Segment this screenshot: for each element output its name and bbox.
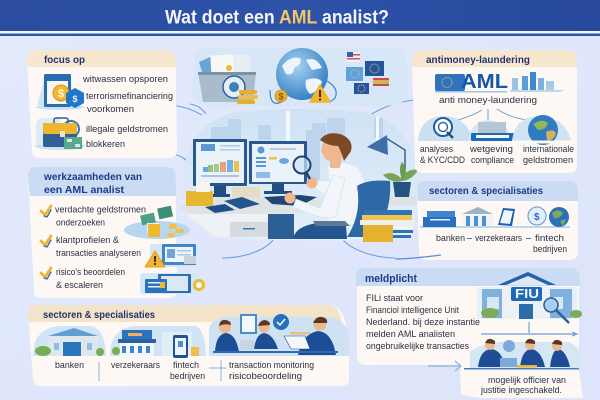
icon: check 2 bbox=[41, 236, 51, 247]
heading: werkzaamheden: werkzaamheden van bbox=[43, 171, 142, 183]
text: transaction monitoring: transaction monitoring bbox=[229, 360, 314, 371]
icon: flags bbox=[346, 52, 389, 94]
logo: AML: AML bbox=[461, 71, 508, 93]
icon: internationale globe bbox=[512, 115, 572, 145]
logo: AML bbox=[435, 71, 565, 93]
icon: check 1 bbox=[41, 206, 51, 217]
icon: check 3 bbox=[41, 268, 51, 279]
icon row: banks, document, coin, globe bbox=[420, 207, 570, 228]
icon: globe with coin and warning bbox=[270, 48, 336, 103]
chair bbox=[313, 181, 390, 237]
text: transaction monitoring bbox=[229, 360, 314, 382]
heading: antimoney-laundering: antimoney-laundering bbox=[426, 54, 530, 66]
desk bbox=[180, 182, 417, 239]
icon: document box with coins bbox=[198, 54, 258, 104]
text: witwassen opsporen: witwassen opsporen bbox=[82, 74, 168, 85]
text: banken verzekeraars fintech bedrijven: banken bbox=[436, 233, 465, 244]
heading: focus op: focus op bbox=[44, 54, 85, 66]
text: banken verzekeraars fintech bedrijven: bedrijven bbox=[533, 244, 567, 255]
text: officier van justitie: justitie ingeschakeld. bbox=[480, 385, 562, 396]
text: terrorismefinanciering voorkomen: voorkomen bbox=[87, 104, 134, 115]
text: analyses KYC/CDD bbox=[420, 144, 465, 166]
heading: werkzaamheden bbox=[43, 171, 142, 196]
text: FIU explanation: ongebruikelijke transacties bbox=[366, 341, 469, 352]
text: terrorismefinanciering voorkomen: terrorismefinanciering bbox=[86, 91, 173, 102]
title banner: Wat doet een AML analist? bbox=[165, 8, 389, 28]
text: illegale geldstromen blokkeren: blokkeren bbox=[86, 139, 125, 150]
text: internationale geldstromen: internationale bbox=[523, 144, 574, 155]
analyst bbox=[284, 133, 366, 239]
icon row: banks, document, coin, globe: $ bbox=[534, 212, 540, 223]
panel: sectoren right bbox=[417, 181, 578, 260]
text: internationale geldstromen bbox=[523, 144, 574, 166]
panel: antimoney-laundering bbox=[412, 50, 577, 173]
text: wetgeving compliance bbox=[469, 144, 514, 166]
connector curves bbox=[171, 99, 427, 258]
text: FIU explanation bbox=[366, 293, 480, 352]
text: illegale geldstromen blokkeren bbox=[86, 124, 168, 150]
icon: warning and client profile bbox=[145, 244, 196, 267]
illustration: analist aan bureau bbox=[180, 109, 418, 242]
text: klantprofielen bbox=[56, 235, 141, 259]
text: banken verzekeraars fintech bedrijven: verzekeraars bbox=[475, 233, 522, 244]
icon: document with dollar coin and shield: $ bbox=[72, 94, 78, 104]
text: risico's beoordelen bbox=[56, 267, 125, 291]
text: FIU explanation: FILi staat voor bbox=[366, 293, 423, 304]
panel: focus op bbox=[27, 50, 177, 158]
heading: werkzaamheden: een AML analist bbox=[44, 184, 125, 196]
panel: sectoren bottom bbox=[28, 305, 349, 386]
panel: werkzaamheden bbox=[28, 167, 205, 298]
icon: coins and banknotes bbox=[124, 206, 190, 239]
text: klantprofielen: klantprofielen & bbox=[56, 235, 120, 246]
panel: top center illustration bbox=[192, 47, 408, 106]
icon: document with dollar coin and shield bbox=[36, 74, 84, 110]
icon: FIU building with magnifier bbox=[477, 272, 582, 323]
arrow: FIU down and right bbox=[481, 322, 577, 336]
text: officier van justitie bbox=[480, 375, 566, 396]
title banner bbox=[0, 0, 600, 36]
icon: magnifying glass bbox=[294, 156, 310, 179]
text: illegale geldstromen blokkeren: illegale geldstromen bbox=[86, 124, 168, 135]
text: terrorismefinanciering voorkomen bbox=[86, 91, 173, 115]
text: analyses KYC/CDD: & KYC/CDD bbox=[420, 155, 465, 166]
icon: briefcase with banknotes bbox=[35, 118, 85, 150]
text: wetgeving compliance: compliance bbox=[471, 155, 514, 166]
illustration: three analysts meeting bbox=[209, 314, 349, 356]
text: internationale geldstromen: geldstromen bbox=[523, 155, 573, 166]
text: klantprofielen: transacties analyseren bbox=[56, 248, 141, 259]
text: officier van justitie: mogelijk officier van bbox=[488, 375, 566, 386]
text: banken: banken bbox=[55, 360, 84, 371]
icon: FIU building with magnifier: FIU bbox=[515, 287, 539, 301]
icon: bank building bbox=[33, 326, 106, 356]
text: analyses KYC/CDD: analyses bbox=[420, 144, 453, 155]
heading: sectoren bottom: sectoren & specialisaties bbox=[43, 309, 155, 321]
heading: meldplicht: meldplicht bbox=[365, 273, 417, 285]
icon: compliance document stack bbox=[468, 120, 514, 141]
text: risico's beoordelen: risico's beoordelen bbox=[56, 267, 125, 278]
text: banken verzekeraars fintech bedrijven: fintech bbox=[535, 233, 564, 244]
text: verzekeraars: verzekeraars bbox=[111, 360, 160, 371]
arrow: to officer bbox=[428, 361, 461, 371]
text: fintech bedrijven bbox=[170, 360, 205, 382]
text: fintech bedrijven: fintech bbox=[173, 360, 199, 371]
monitor left bbox=[193, 139, 247, 197]
city skyline bbox=[211, 118, 383, 180]
lamp and plant bbox=[367, 135, 418, 197]
icon: risk cards bbox=[140, 273, 205, 294]
heading: sectoren right: sectoren & specialisaties bbox=[429, 185, 543, 197]
panel: meldplicht bbox=[356, 268, 583, 398]
text: verdachte geldstromen bbox=[55, 204, 146, 228]
text: anti money-laundering: anti money-laundering bbox=[439, 95, 537, 106]
text: verdachte geldstromen: verdachte geldstromen bbox=[55, 204, 146, 216]
text: risico's beoordelen: & escaleren bbox=[56, 280, 103, 291]
text: fintech bedrijven: bedrijven bbox=[170, 371, 205, 382]
text: FIU explanation: Nederland. bij deze instantie bbox=[366, 317, 480, 328]
icon: globe with coin and warning: $ bbox=[278, 92, 284, 102]
text: banken verzekeraars fintech bedrijven bbox=[436, 233, 567, 255]
illustration: three officials at table bbox=[464, 339, 580, 370]
text: transaction monitoring: risicobeoordeling bbox=[229, 371, 302, 382]
text: wetgeving compliance: wetgeving bbox=[469, 144, 513, 155]
icon: search analyses bbox=[418, 116, 473, 141]
text: FIU explanation: melden AML analisten bbox=[366, 329, 455, 340]
icon: document with dollar coin and shield: $ bbox=[58, 88, 64, 100]
monitor right bbox=[249, 141, 307, 194]
text: verdachte geldstromen: onderzoeken bbox=[56, 218, 105, 228]
stack of books and folder bbox=[360, 210, 414, 242]
text: FIU explanation: Financiol intelligence Unit bbox=[366, 305, 459, 316]
icon: insurer building and fintech tablet bbox=[110, 326, 206, 358]
